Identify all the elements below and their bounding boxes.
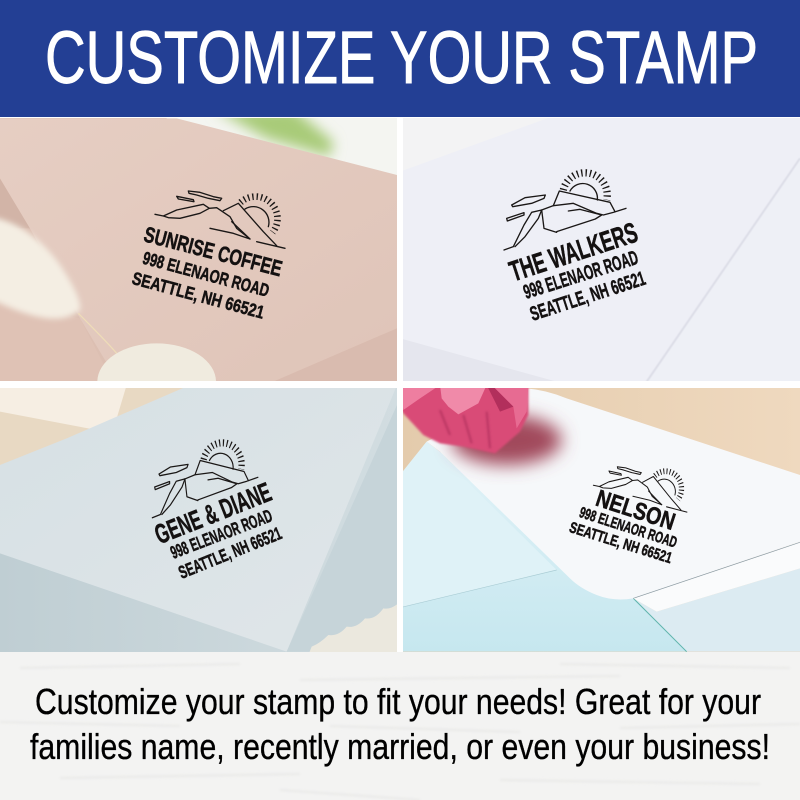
- stamp text: [150, 476, 285, 583]
- peony flower: [400, 385, 528, 453]
- stamp text: 998 ELENAOR ROAD: [168, 506, 275, 563]
- panel: white envelope with The Walkers stamp: [403, 118, 800, 381]
- panel: pink envelope with Sunrise Coffee stamp: [0, 118, 397, 381]
- header banner: [0, 0, 800, 117]
- stamp artwork: mountain and sun: [504, 173, 626, 250]
- stamp text: 998 ELENAOR ROAD: [141, 248, 271, 301]
- stamp text: 998 ELENAOR ROAD: [577, 504, 679, 552]
- stamp text: [130, 222, 285, 323]
- stamp artwork: mountain and sun: [152, 443, 258, 518]
- panel: pale blue envelope with Gene & Diane stamp: [0, 388, 397, 652]
- stamp artwork: mountain and sun: [593, 467, 687, 512]
- caption text: [30, 681, 770, 767]
- stamp artwork: mountain and sun: [155, 191, 285, 248]
- stamp text: SEATTLE, NH 66521: [130, 268, 267, 323]
- stamp text: [506, 217, 648, 326]
- stamp text: SEATTLE, NH 66521: [527, 268, 648, 326]
- stamp text: THE WALKERS: [506, 217, 642, 288]
- stamp text: SUNRISE COFFEE: [141, 222, 285, 281]
- stamp text: 998 ELENAOR ROAD: [521, 247, 641, 304]
- stamp text: SEATTLE, NH 66521: [567, 519, 674, 567]
- footer: white wood caption area: [0, 652, 800, 800]
- stamp text: [567, 485, 679, 567]
- stamp text: NELSON: [592, 485, 678, 536]
- panel: white and aqua envelope with Nelson stamp: [403, 388, 800, 652]
- stamp text: GENE & DIANE: [150, 476, 276, 550]
- stamp text: SEATTLE, NH 66521: [176, 523, 285, 583]
